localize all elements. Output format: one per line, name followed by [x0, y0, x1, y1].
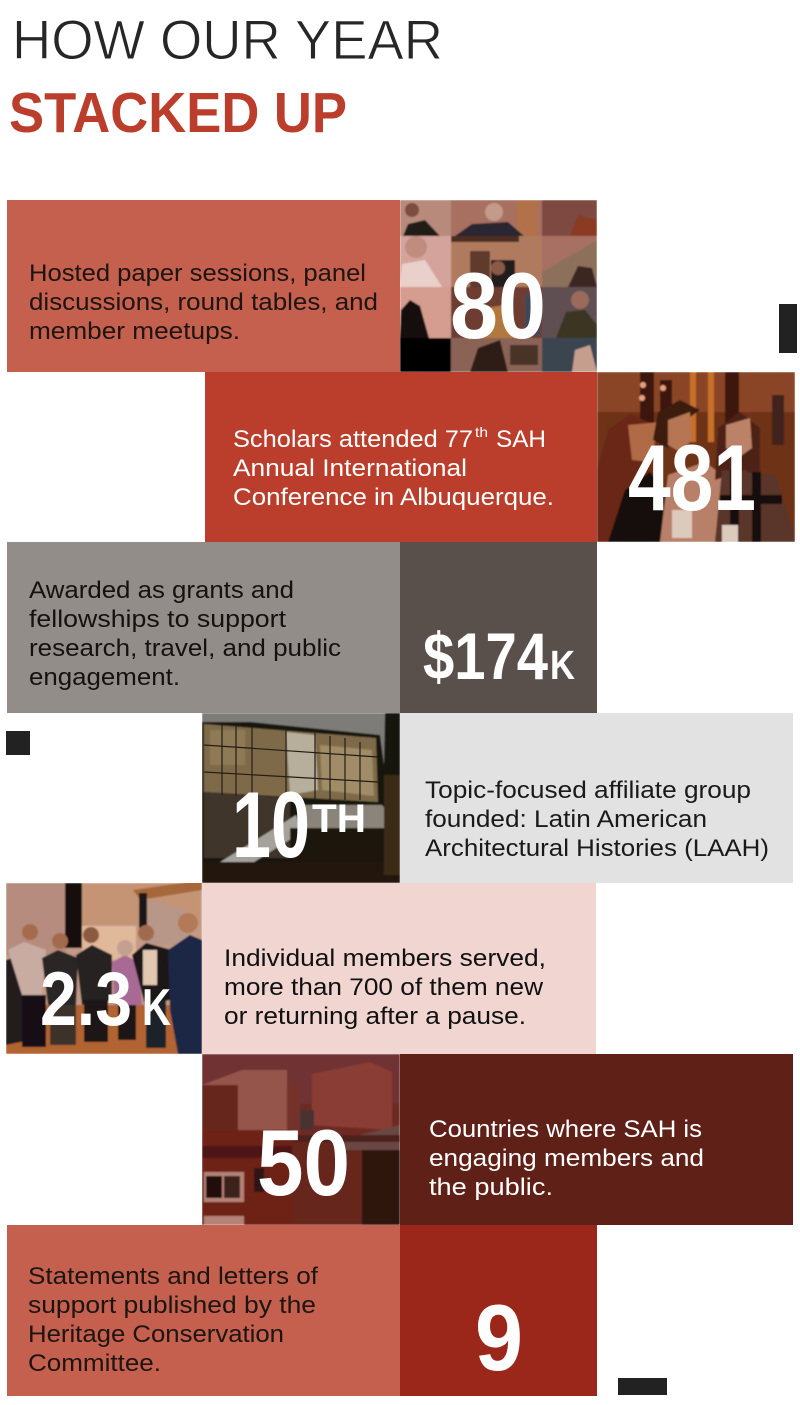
text: conference description: SAH: [496, 426, 546, 453]
text: grants description: Awarded as grants and: [29, 577, 294, 604]
stat: $174K: K: [550, 642, 575, 688]
text: statements description: Heritage Conservation: [28, 1321, 284, 1348]
text: grants description: [29, 577, 341, 691]
text: affiliate group description: [425, 777, 769, 862]
panel: statements description: [7, 1225, 400, 1396]
photo: city buildings with stat 50: [202, 1054, 400, 1225]
text: conference description: Scholars attended 77: [233, 426, 473, 453]
stat: 2.3K: 2.3: [40, 957, 132, 1042]
stat: 10th: 10: [232, 772, 310, 877]
panel: stat $174K: [400, 542, 597, 713]
text: paper sessions description: discussions, round tables, and: [29, 289, 378, 316]
text: statements description: Committee.: [28, 1350, 161, 1377]
text: countries description: the public.: [429, 1174, 553, 1201]
text: statements description: [28, 1263, 318, 1377]
photo: conference attendees with stat 481: [597, 372, 795, 542]
photo: building with stat 10th: [202, 713, 400, 883]
text: countries description: [429, 1116, 704, 1201]
decorative square: left: [6, 731, 30, 755]
title: HOW OUR YEAR: [12, 8, 443, 71]
text: members description: or returning after a pause.: [224, 1003, 526, 1030]
panel: members description: [202, 883, 596, 1054]
stat: 80: 80: [450, 253, 546, 358]
panel: countries description: [400, 1054, 793, 1225]
stat: $174K: $174: [423, 619, 548, 693]
text: affiliate group description: founded: Latin American: [425, 806, 707, 833]
text: grants description: fellowships to support: [29, 606, 286, 633]
text: members description: [224, 945, 546, 1030]
text: paper sessions description: Hosted paper sessions, panel: [29, 260, 366, 287]
text: members description: Individual members served,: [224, 945, 546, 972]
text: members description: more than 700 of them new: [224, 974, 544, 1001]
decorative bar: right: [779, 304, 797, 353]
text: countries description: engaging members and: [429, 1145, 704, 1172]
panel: conference attendance: [205, 372, 597, 542]
text: grants description: research, travel, and public: [29, 635, 341, 662]
photo: group of members with stat 2.3K: [6, 880, 202, 1054]
panel: affiliate group description: [400, 713, 793, 883]
text: affiliate group description: Architectural Histories (LAAH): [425, 835, 769, 862]
panel: stat 9: [400, 1225, 597, 1396]
photo: video call grid with stat 80: [400, 200, 597, 372]
text: paper sessions description: [29, 260, 378, 345]
text: conference description: Annual International: [233, 455, 467, 482]
stat: 50: 50: [257, 1110, 350, 1215]
text: affiliate group description: Topic-focused affiliate group: [425, 777, 751, 804]
text: countries description: Countries where SAH is: [429, 1116, 702, 1143]
title: STACKED UP: [9, 81, 347, 145]
decorative bar: bottom: [618, 1378, 667, 1395]
stat: 9: 9: [475, 1285, 523, 1390]
text: conference description: [233, 424, 554, 511]
text: conference description: Conference in Albuquerque.: [233, 484, 554, 511]
panel: grants description: [7, 542, 400, 713]
text: statements description: support published by the: [28, 1292, 316, 1319]
title: [9, 8, 443, 145]
text: paper sessions description: member meetups.: [29, 318, 240, 345]
stat: 2.3K: K: [142, 979, 171, 1037]
text: conference description: th: [475, 424, 488, 440]
text: statements description: Statements and letters of: [28, 1263, 318, 1290]
panel: paper sessions: [7, 200, 400, 372]
stat: 481: 481: [628, 425, 756, 530]
stat: 10th: TH: [312, 797, 366, 841]
text: grants description: engagement.: [29, 664, 180, 691]
